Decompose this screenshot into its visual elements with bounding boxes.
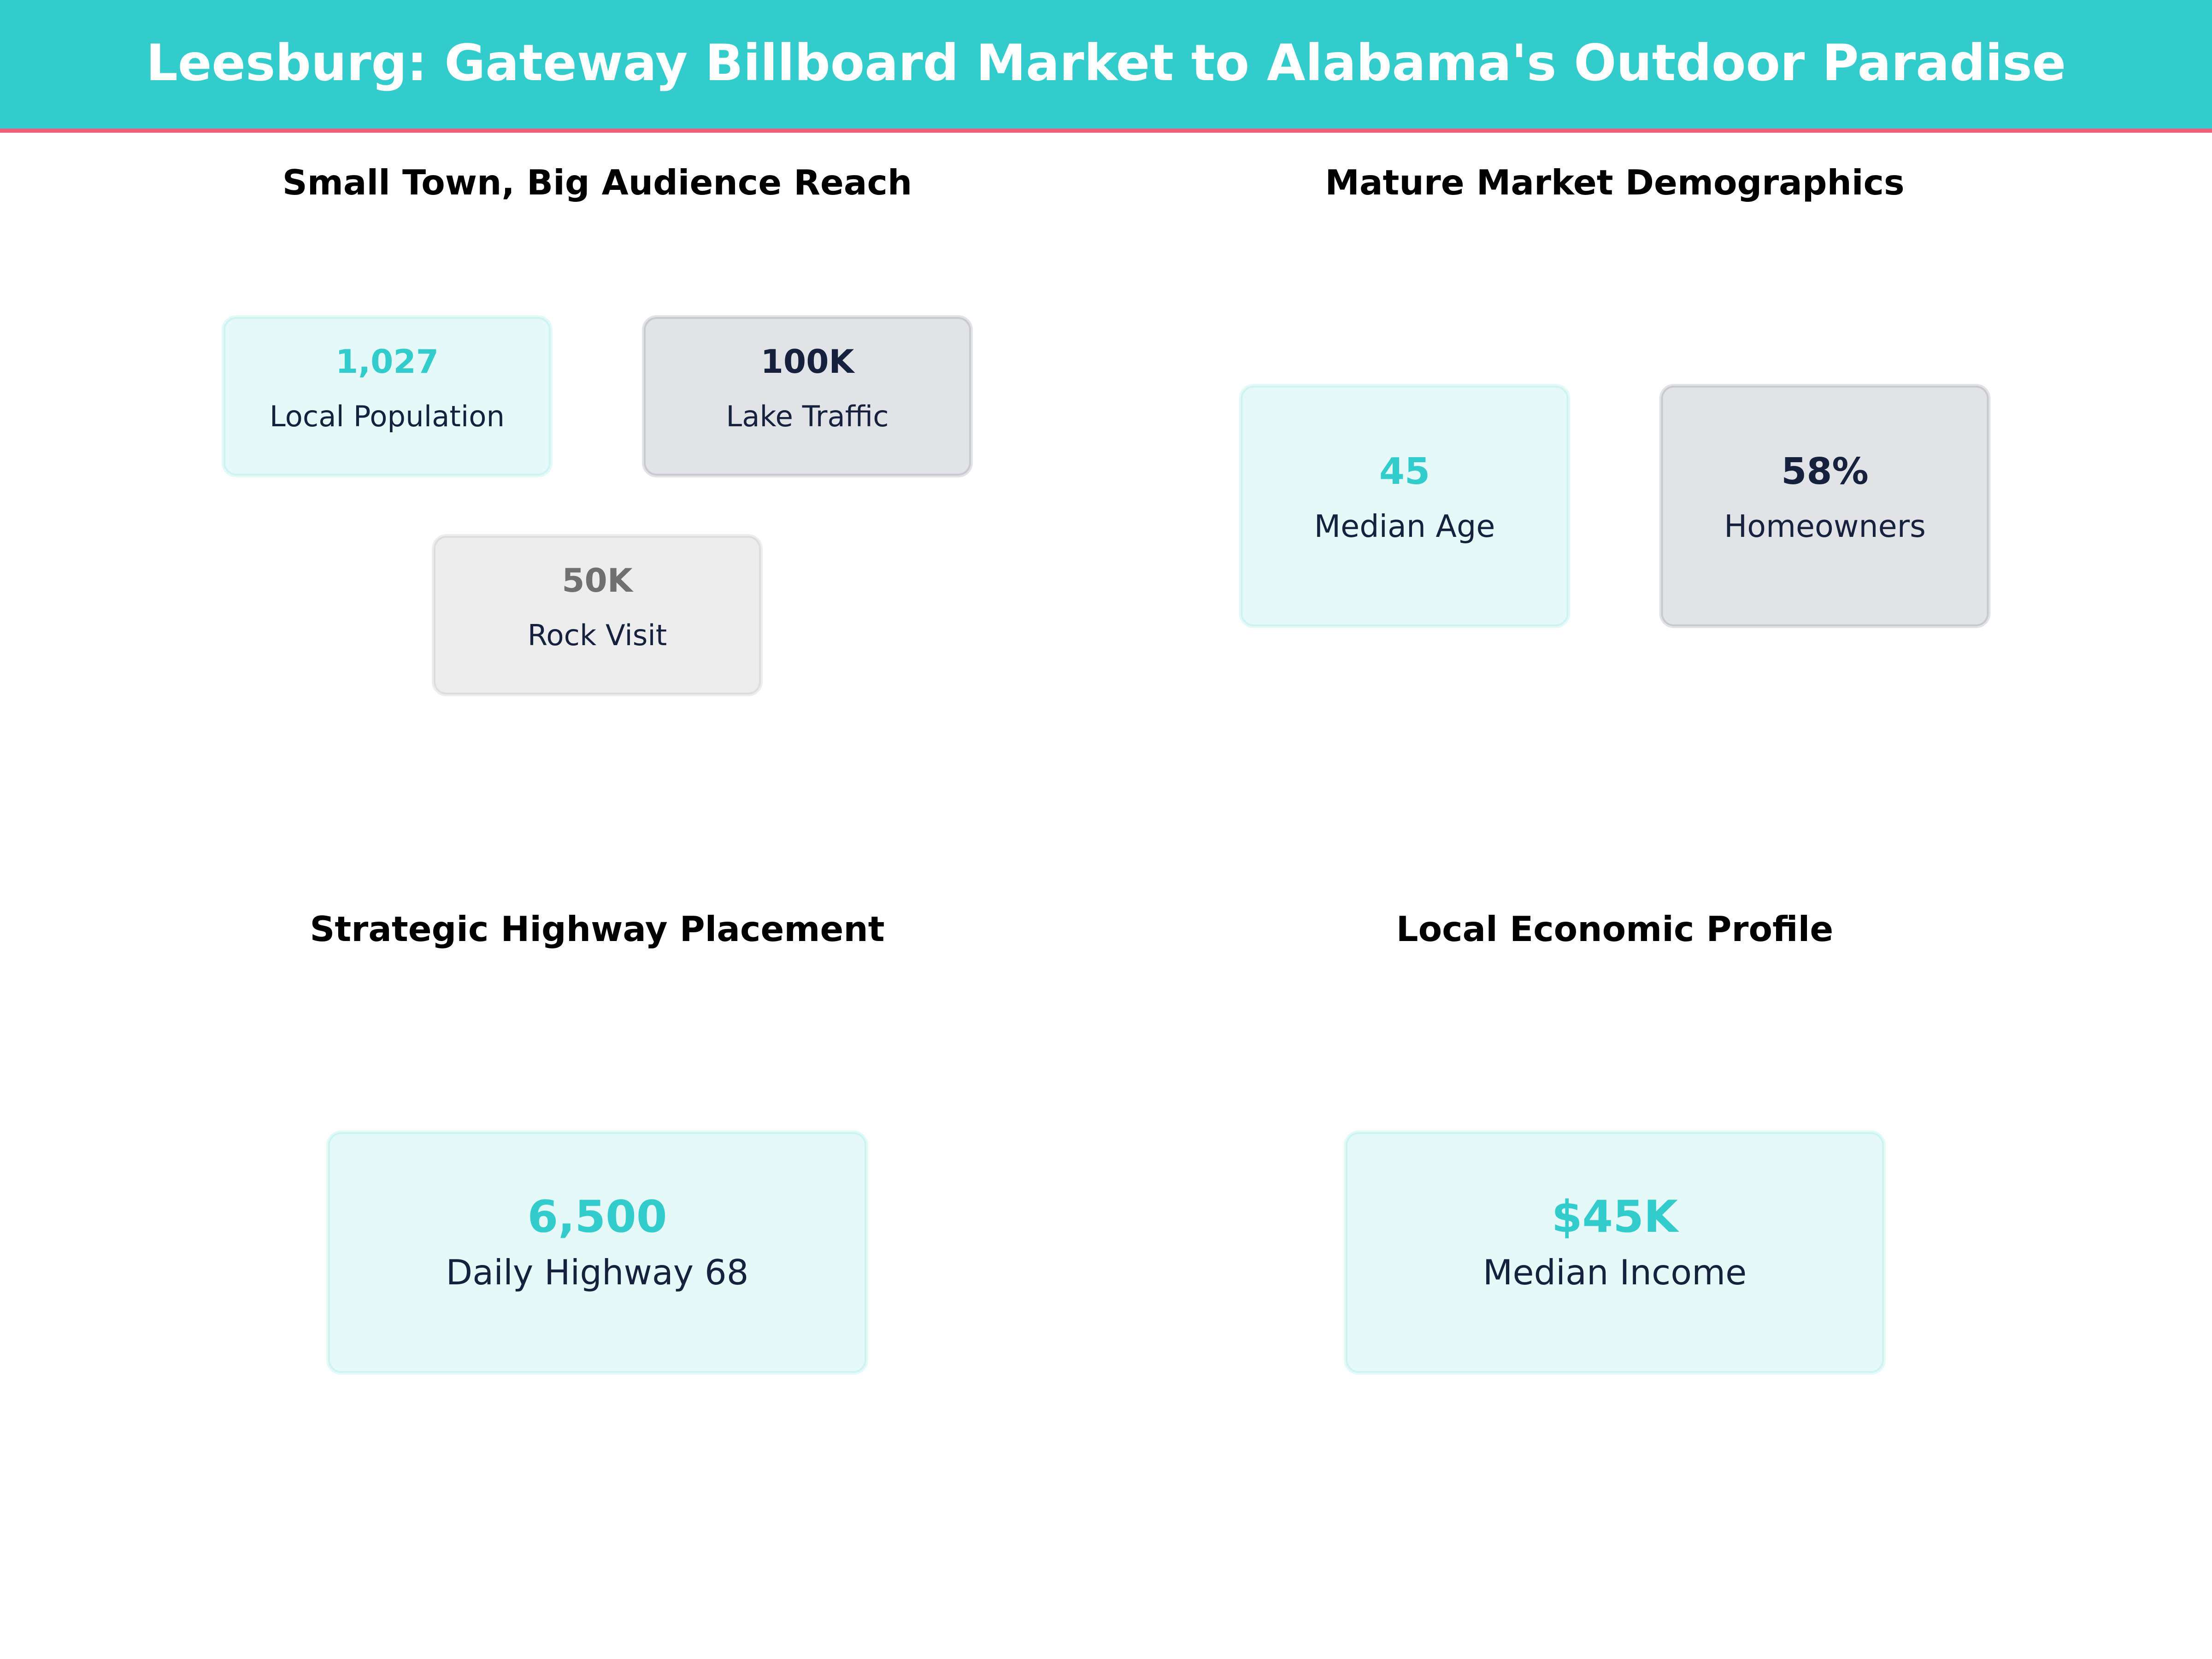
- heading: demographics: Mature Market Demographics: [1325, 162, 1905, 203]
- card: lake traffic: Lake Traffic: [726, 400, 889, 433]
- card: daily highway 68: Daily Highway 68: [446, 1252, 748, 1293]
- panel: small town, big audience reach: [224, 162, 971, 694]
- card: rock visit: 50K: [562, 561, 634, 600]
- card: median age: 45: [1379, 450, 1430, 493]
- panel: mature market demographics: [1241, 162, 1989, 626]
- card: median income: Median Income: [1483, 1252, 1747, 1293]
- card: rock visit: Rock Visit: [528, 618, 667, 652]
- card: lake traffic: 100K: [761, 342, 855, 381]
- card: homeowners: 58%: [1781, 450, 1869, 493]
- card: median age: Median Age: [1314, 508, 1495, 544]
- card: daily highway 68: [328, 1132, 866, 1373]
- panel: local economic profile: [1346, 909, 1884, 1373]
- heading: highway: Strategic Highway Placement: [310, 909, 885, 949]
- card: local population: 1,027: [335, 342, 439, 381]
- panel: strategic highway placement: [310, 909, 885, 1373]
- card: lake traffic: [644, 317, 971, 476]
- card: daily highway 68: 6,500: [527, 1191, 667, 1242]
- title: Leesburg: Gateway Billboard Market to Alabama's Outdoor Paradise: [146, 34, 2066, 92]
- heading: economic: Local Economic Profile: [1396, 909, 1833, 949]
- card: rock visit: [434, 536, 761, 694]
- card: homeowners: Homeowners: [1724, 508, 1926, 544]
- card: median age: [1241, 386, 1569, 626]
- card: median income: $45K: [1552, 1191, 1680, 1242]
- heading: small town: Small Town, Big Audience Reach: [282, 162, 912, 203]
- card: homeowners: [1661, 386, 1989, 626]
- header banner: [0, 0, 2212, 133]
- card: median income: [1346, 1132, 1884, 1373]
- card: local population: Local Population: [270, 400, 505, 433]
- card: local population: [224, 317, 551, 476]
